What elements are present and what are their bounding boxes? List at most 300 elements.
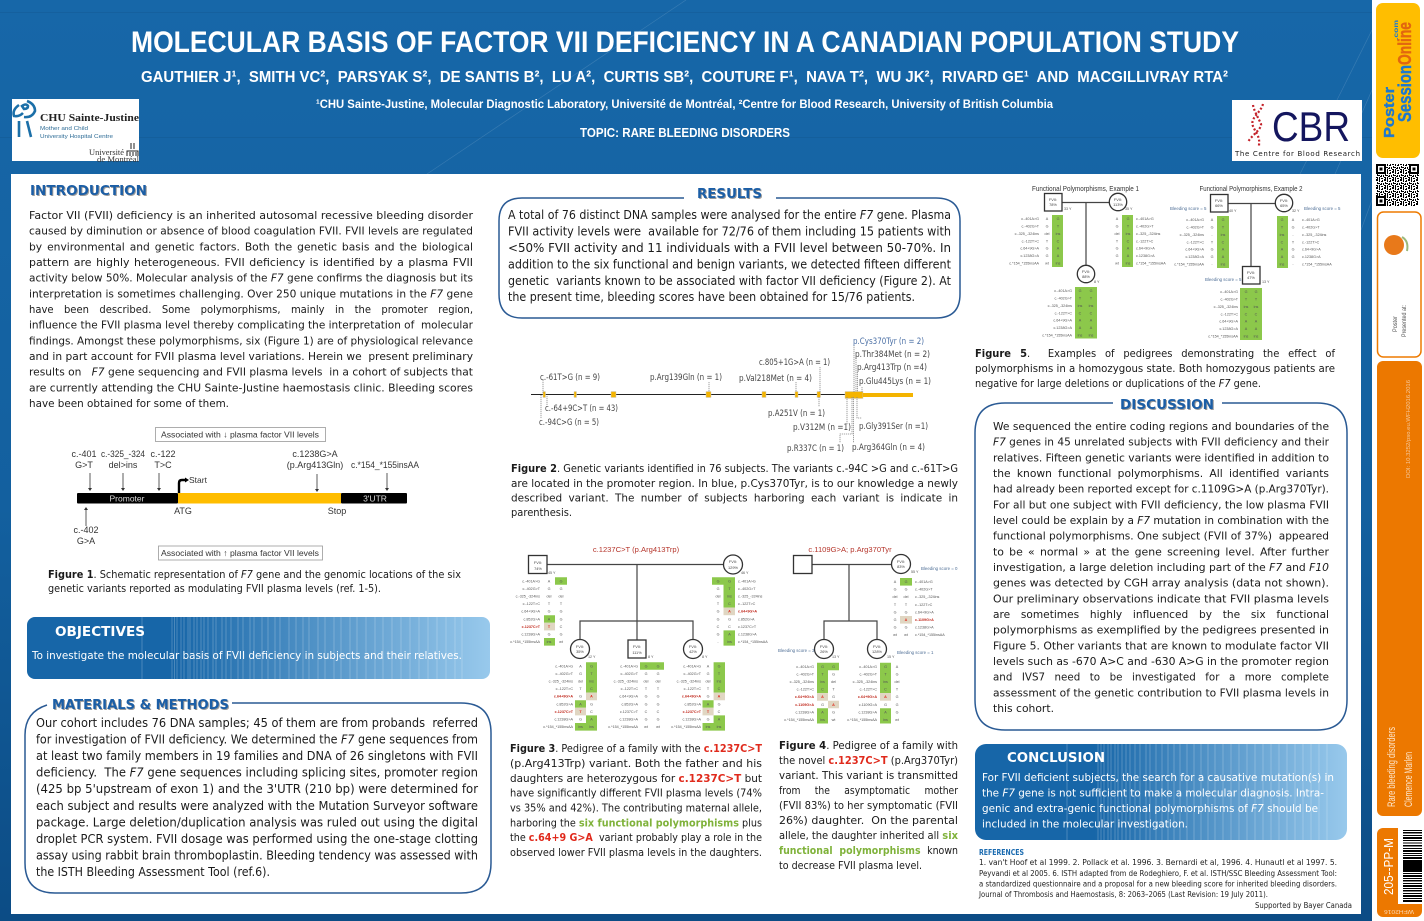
mother haplotype table: G <box>1116 224 1119 228</box>
mother haplotype table: G <box>1292 255 1295 259</box>
mother haplotype table: G <box>1292 248 1295 252</box>
daughter 2 haplotype table: A <box>718 718 721 722</box>
mother haplotype table: c.-402G>T <box>1136 224 1154 228</box>
daughter 2 haplotype table: c.64+9G>A <box>682 695 701 699</box>
variant labels: c.-61T>G (n = 9) <box>540 373 600 383</box>
son haplotype table <box>608 662 664 729</box>
variant labels: p.R337C (n = 1) <box>787 444 844 454</box>
mother symbol: FVII: <box>729 559 737 564</box>
heading: conclusion: CONCLUSION <box>1007 751 1105 766</box>
daughter haplotype table: c.-401A>G <box>796 665 814 669</box>
text: discussion body: level could be explain by a F7 mutation in combination with the <box>993 514 1329 527</box>
daughter 1 haplotype table: C <box>590 710 593 714</box>
mother haplotype table: C <box>728 625 731 629</box>
mother haplotype table: del <box>904 595 909 599</box>
sidebar: poster code with barcode: 205--PP-M <box>1381 838 1396 895</box>
son haplotype table: c.-401A>G <box>859 665 877 669</box>
father haplotype table: wt <box>559 640 563 644</box>
child haplotype table: A <box>1090 326 1093 330</box>
daughter symbol: 26% <box>820 649 828 654</box>
mother haplotype table: - <box>1292 263 1294 267</box>
text: introduction body: are currently attending the CHU Sainte-Justine haemostasis clinic. Bleeding scores <box>29 381 473 394</box>
father haplotype table: c.*154_*155insAA <box>1174 263 1205 267</box>
sidebar: topic panel: Rare bleeding disorders <box>1386 727 1398 807</box>
variant labels: p.Cys370Tyr (n = 2) <box>853 337 924 347</box>
son haplotype table: G <box>645 702 648 706</box>
figure 1: gene schematic <box>71 428 419 560</box>
father haplotype table <box>1174 216 1229 268</box>
son haplotype table: del <box>895 680 900 684</box>
text: methods body: Our cohort includes 76 DNA samples; 45 of them are from probands referred <box>36 716 478 730</box>
daughter 1 haplotype table: G <box>590 702 593 706</box>
father haplotype table: del <box>1045 232 1050 236</box>
daughter 2 haplotype table: del <box>706 680 711 684</box>
daughter haplotype table: c.-402G>T <box>796 672 815 676</box>
mother symbol: 35 Y <box>1125 207 1133 211</box>
father haplotype table: c.64+9G>A <box>1020 247 1040 251</box>
variant labels: p.Arg364Gln (n = 4) <box>852 443 925 453</box>
text: discussion body: are sometimes highly influenced by the six functional <box>993 608 1329 621</box>
mother haplotype table: c.852G>A <box>738 617 755 621</box>
mother haplotype table: ins <box>1126 232 1131 236</box>
figure 5: pedigrees, example 1 <box>1009 186 1166 338</box>
daughter 2 haplotype table: G <box>707 718 710 722</box>
mother haplotype table: T <box>1116 239 1119 243</box>
panel: introduction <box>29 184 474 410</box>
son haplotype table: c.-122T>C <box>621 687 638 691</box>
father symbol <box>794 556 812 574</box>
text: introduction body: results on F7 gene sequencing and FVII plasma levels in a cohort of subjects that <box>29 366 474 379</box>
child haplotype table: ins <box>1244 305 1249 309</box>
child haplotype table: c.-402G>T <box>1220 297 1239 301</box>
daughter haplotype table: c.-325_-324ins <box>790 680 814 684</box>
father haplotype table: C <box>1222 240 1225 244</box>
text: objectives body: To investigate the molecular basis of FVII deficiency in subjects and their relatives. <box>31 649 462 662</box>
daughter haplotype table: G <box>832 672 835 676</box>
daughter haplotype table <box>784 663 839 724</box>
figure 3: pedigree <box>510 545 768 731</box>
mother haplotype table: ins <box>1126 262 1131 266</box>
heading: introduction: INTRODUCTION <box>30 184 147 199</box>
mother haplotype table: c.1237C>T <box>738 625 757 629</box>
mother haplotype table: C <box>1281 240 1284 244</box>
figure 3 caption: vs 35% and 42%). The contributing maternal allele, <box>510 802 762 814</box>
father haplotype table: G <box>560 610 563 614</box>
child symbol: 47% <box>1247 275 1255 280</box>
father haplotype table: G <box>548 610 551 614</box>
father haplotype table: C <box>1057 239 1060 243</box>
mother haplotype table: A <box>905 618 908 622</box>
text: discussion body: Our preliminary observations indicate that FVII plasma levels <box>993 592 1329 605</box>
mother haplotype table: c.-402G>T <box>1302 225 1320 229</box>
father symbol: 33 Y <box>1064 207 1072 211</box>
variant labels: p.Gly391Ser (n =1) <box>859 422 928 432</box>
figure 4 title: c.1109G>A; p.Arg370Tyr <box>808 545 892 554</box>
figure 5 caption: polymorphisms in a homozygous state. Both homozygous patients are <box>975 363 1335 375</box>
father haplotype table: c.*154_*155insAA <box>1009 262 1040 266</box>
panel: materials and methods <box>25 698 491 893</box>
mother symbol: 129% <box>728 565 739 570</box>
daughter 1 haplotype table: A <box>590 695 593 699</box>
daughter 2 haplotype table: c.-325_-324ins <box>677 680 701 684</box>
father haplotype table: c.1237C>T <box>522 625 541 629</box>
mother haplotype table: A <box>1292 218 1295 222</box>
text: conclusion body: genic and extra-genic functional polymorphisms of F7 should be <box>982 802 1318 815</box>
mother symbol: FVII: <box>897 559 905 564</box>
daughter haplotype table: C <box>821 688 824 692</box>
daughter 2 haplotype table: A <box>707 664 710 668</box>
figure 3 title: c.1237C>T (p.Arg413Trp) <box>593 545 680 554</box>
text: discussion body: For all but one subject with FVII deficiency, the low plasma FVII <box>993 498 1329 511</box>
mother haplotype table: A <box>1127 247 1130 251</box>
father haplotype table: G <box>1211 248 1214 252</box>
son haplotype table: wt <box>656 725 660 729</box>
daughter 2 haplotype table: T <box>707 687 710 691</box>
son haplotype table: G <box>645 718 648 722</box>
daughter 1 haplotype table: G <box>579 695 582 699</box>
mother haplotype table: T <box>1281 225 1284 229</box>
daughter haplotype table: T <box>832 688 835 692</box>
son haplotype table: G <box>657 718 660 722</box>
son haplotype table: c.-402G>T <box>859 672 878 676</box>
mother haplotype table: C <box>717 625 720 629</box>
daughter 1 symbol: FVII: <box>576 644 584 649</box>
text: conclusion body <box>982 771 1334 830</box>
sidebar: presented-at card <box>1378 212 1421 357</box>
text: methods body: the ISTH Bleeding Assessment Tool (ref.6). <box>36 865 270 879</box>
child haplotype table <box>1208 288 1262 340</box>
arrows to variant locations <box>84 473 389 526</box>
daughter 1 haplotype table: c.-325_-324ins <box>549 680 573 684</box>
son haplotype table: T <box>896 688 899 692</box>
child haplotype table: G <box>1090 289 1093 293</box>
figure 5: pedigrees, example 2 <box>1170 186 1341 340</box>
father haplotype table: G <box>1057 217 1060 221</box>
barcode <box>1403 830 1422 902</box>
mother haplotype table: c.*154_*155insAA <box>1302 263 1332 267</box>
mother haplotype table: - <box>1292 233 1294 237</box>
logo: CHU Sainte-Justine: Université <box>89 148 124 157</box>
child haplotype table: G <box>1245 290 1248 294</box>
legend box: increased levels <box>158 546 322 560</box>
son haplotype table: G <box>657 695 660 699</box>
pedigree lines <box>812 564 891 640</box>
daughter 1 haplotype table: ins <box>578 725 583 729</box>
daughter haplotype table: A <box>821 710 824 714</box>
child haplotype table: c.*154_*155insAA <box>1042 334 1073 338</box>
father symbol: 40 Y <box>1229 209 1237 213</box>
child haplotype table: A <box>1255 320 1258 324</box>
figure 3 caption: daughters are heterozygous for c.1237C>T but <box>510 773 762 785</box>
gene bar <box>77 493 407 504</box>
daughter 2 haplotype table: c.-122T>C <box>684 687 701 691</box>
child haplotype table: c.64+9G>A <box>1219 320 1239 324</box>
daughter 2 symbol: FVII: <box>689 644 697 649</box>
daughter 1 haplotype table: c.852G>A <box>556 702 574 706</box>
figure 4 caption: variant. This variant is transmitted <box>779 770 958 782</box>
text: discussion body: functional polymorphisms. One subject (FVII of 37%) appeared <box>993 530 1329 543</box>
text: methods body: droplet PCR system. FVII dosage was performed using the one-stage clotting <box>36 832 478 846</box>
daughter 2 haplotype table: C <box>718 687 721 691</box>
daughter haplotype table: del <box>831 680 836 684</box>
daughter 2 haplotype table: A <box>707 702 710 706</box>
mother symbol <box>892 554 958 574</box>
variant labels above gene: c.-401 <box>71 449 97 459</box>
father symbol: 45 Y <box>548 571 556 575</box>
father haplotype table: c.-401A>G <box>1021 217 1039 221</box>
text: introduction body: have been described. Some polymorphisms, mainly in the promoter region, <box>29 303 473 316</box>
father haplotype table <box>510 577 567 646</box>
son haplotype table: c.*154_*155insAA <box>847 718 878 722</box>
mother haplotype table: G <box>894 610 897 614</box>
son haplotype table: del <box>656 680 661 684</box>
variant labels: p.Glu445Lys (n = 1) <box>859 377 931 387</box>
variant labels <box>539 337 931 454</box>
child haplotype table: T <box>1079 296 1082 300</box>
father haplotype table: T <box>548 625 551 629</box>
daughter haplotype table: G <box>832 710 835 714</box>
heading: objectives: OBJECTIVES <box>55 625 145 640</box>
logo: CHU Sainte-Justine: University Hospital Centre <box>40 134 113 140</box>
sidebar: topic panel <box>1377 361 1422 816</box>
text: discussion body: relatives. Fifteen genetic variants were identified in addition to <box>993 451 1329 464</box>
example 1 title: Functional Polymorphisms, Example 1 <box>1032 186 1139 193</box>
heading: materials and methods: MATERIALS & METHODS <box>52 698 229 713</box>
mother haplotype table <box>1115 215 1166 267</box>
daughter 2 haplotype table: c.*154_*155insAA <box>671 725 702 729</box>
father haplotype table: c.-325_-324ins <box>1015 232 1039 236</box>
text: results body <box>508 208 951 304</box>
child haplotype table: c.-325_-324ins <box>1214 305 1238 309</box>
daughter haplotype table: ins <box>820 680 825 684</box>
son symbol <box>868 640 934 659</box>
daughter 2 haplotype table: c.-401A>G <box>683 664 701 668</box>
son symbol: FVII: <box>633 644 641 649</box>
daughter 1 haplotype table: c.64+9G>A <box>554 695 573 699</box>
references: a standardized questionnaire and a proposal for a new bleeding score for inherited bleeding disorders. <box>979 880 1337 888</box>
daughter 2 haplotype table: T <box>707 710 710 714</box>
mother haplotype table: c.*154_*155insAA <box>1136 262 1166 266</box>
authors: GAUTHIER J¹, SMITH VC², PARSYAK S², DE SANTIS B², LU A², CURTIS SB², COUTURE F¹, NAVA T², WU JK², RIVARD GE¹ AND MACGILLIVRAY RTA² <box>141 69 1228 86</box>
child haplotype table <box>1042 287 1097 338</box>
figure 3 caption: the c.64+9 G>A variant probably play a role in the <box>510 832 762 844</box>
references: Peyvandi et al 2005. 6. ISTH adapted from de Rodeghiero, F. et al. ISTH/SSC Bleeding Assessment Tool: <box>979 869 1337 878</box>
mother haplotype table: G <box>894 618 897 622</box>
son haplotype table: G <box>896 703 899 707</box>
mother haplotype table: c.64+9G>A <box>738 610 757 614</box>
panel: discussion <box>975 398 1347 730</box>
variant label below gene: c.-402 <box>73 525 99 535</box>
daughter haplotype table: G <box>832 695 835 699</box>
father symbol: 78% <box>1049 202 1057 207</box>
daughter 1 haplotype table: del <box>578 680 583 684</box>
father symbol <box>528 556 556 575</box>
mother haplotype table: del <box>893 595 898 599</box>
mother haplotype table: c.64+9G>A <box>915 610 934 614</box>
variant labels above gene: del>ins <box>109 460 138 470</box>
text: discussion body: F7 genes in 45 unrelated subjects with FVII deficiency and their <box>993 436 1329 449</box>
references: 1. van't Hoof et al 1999. 2. Pollack et al. 1996. 3. Bernardi et al, 1996. 4. Hunautl et al 1997. 5. <box>979 858 1337 867</box>
figure 3 caption <box>510 743 763 859</box>
text: introduction body: pattern are highly heterogeneous. FVII deficiency is identified by a plasma FVII <box>29 256 473 269</box>
father haplotype table: ins <box>1056 262 1061 266</box>
mother haplotype table: G <box>728 579 731 583</box>
father symbol <box>1044 194 1072 211</box>
son haplotype table: G <box>884 665 887 669</box>
figure 5 caption: Figure 5. Examples of pedigrees demonstrating the effect of <box>975 348 1335 360</box>
mother haplotype table: c.64+9G>A <box>1302 248 1321 252</box>
figure 4 caption: to decrease FVII plasma level. <box>779 860 922 872</box>
start arrow <box>179 475 208 493</box>
daughter 2 haplotype table: T <box>718 672 721 676</box>
daughter 2 haplotype table: C <box>718 710 721 714</box>
sidebar: PosterSessionOnline logo <box>1376 3 1420 158</box>
son haplotype table: c.64+9G>A <box>858 695 877 699</box>
father symbol <box>1170 194 1237 213</box>
daughter 1 haplotype table: G <box>579 672 582 676</box>
father haplotype table: c.1238G>A <box>1185 255 1205 259</box>
son haplotype table: c.1238G>A <box>619 718 639 722</box>
variant labels above gene: c.1238G>A <box>292 449 338 459</box>
daughter 2 haplotype table: A <box>718 695 721 699</box>
figure 4 caption: allele, the daughter inherited all six <box>779 830 958 842</box>
father haplotype table: G <box>1046 247 1049 251</box>
son haplotype table: A <box>884 695 887 699</box>
daughter 1 haplotype table: C <box>590 687 593 691</box>
daughter 2 haplotype table: c.1237C>T <box>683 710 702 714</box>
figure 5 caption: negative for large deletions or duplications of the F7 gene. <box>975 378 1261 390</box>
mother haplotype table: c.-122T>C <box>1136 239 1154 243</box>
daughter haplotype table: G <box>821 703 824 707</box>
mother haplotype table: c.-122T>C <box>915 603 933 607</box>
mother haplotype table: del <box>1115 232 1120 236</box>
variant labels: p.V312M (n =1) <box>793 423 851 433</box>
son haplotype table: A <box>884 710 887 714</box>
ATG and stop labels <box>174 506 346 516</box>
daughter haplotype table: c.64+9G>A <box>795 695 814 699</box>
text: methods body: (425 bp 5'upstream of exon 1) and the 3'UTR (210 bp) were determined for <box>36 782 478 796</box>
father haplotype table: G <box>560 617 563 621</box>
daughter 1 haplotype table: G <box>590 664 593 668</box>
father haplotype table: T <box>1057 224 1060 228</box>
daughter 2 symbol <box>684 640 708 659</box>
mother haplotype table: G <box>1116 247 1119 251</box>
mother haplotype table: c.-325_-324ins <box>915 595 940 599</box>
text: introduction body: by environmental and genetic factors. Both the genetic basis and the biological <box>29 240 473 253</box>
legend box: decreased levels <box>156 428 326 442</box>
figure 4 caption: (FVII 83%) to her symptomatic (FVII <box>779 800 958 812</box>
daughter 2 haplotype table: G <box>718 702 721 706</box>
mother haplotype table: c.-122T>C <box>738 602 756 606</box>
mother haplotype table: ins <box>727 594 732 598</box>
mother haplotype table: c.*154_*155insAA <box>738 640 768 644</box>
father haplotype table: c.64+9G>A <box>521 610 541 614</box>
child symbol: 88% <box>1082 274 1090 279</box>
mother haplotype table: T <box>1292 240 1295 244</box>
child haplotype table: A <box>1079 326 1082 330</box>
text: results body: FVII activity levels were available for 72/76 of them including 15 patients with <box>508 224 951 238</box>
mother haplotype table: A <box>1281 255 1284 259</box>
logo: CHU Sainte-Justine: Mother and Child <box>40 126 88 132</box>
father haplotype table: c.-401A>G <box>522 579 540 583</box>
text: introduction body <box>29 209 474 410</box>
child symbol: FVII: <box>1247 270 1255 275</box>
father haplotype table: T <box>548 602 551 606</box>
daughter 1 haplotype table: c.1238G>A <box>554 718 574 722</box>
child haplotype table: c.1238G>A <box>1053 326 1073 330</box>
father haplotype table: G <box>1222 218 1225 222</box>
father haplotype table: - <box>1211 233 1213 237</box>
son haplotype table: T <box>657 687 660 691</box>
father haplotype table: - <box>1211 263 1213 267</box>
son haplotype table: c.*154_*155insAA <box>608 725 639 729</box>
daughter haplotype table: c.1109G>A <box>795 703 814 707</box>
heading: discussion: DISCUSSION <box>1120 398 1214 413</box>
mother haplotype table: A <box>728 610 731 614</box>
child haplotype table: ins <box>1078 304 1083 308</box>
mother haplotype table: G <box>894 588 897 592</box>
son haplotype table: G <box>884 703 887 707</box>
father haplotype table: C <box>560 625 563 629</box>
father symbol: FVII: <box>1049 197 1057 202</box>
child haplotype table: C <box>1079 311 1082 315</box>
daughter 1 haplotype table: c.1237C>T <box>555 710 574 714</box>
variant labels: p.A251V (n = 1) <box>768 409 825 419</box>
sidebar: PosterSessionOnline logo: Session <box>1395 65 1415 122</box>
mother symbol: FVII: <box>1114 197 1122 202</box>
text: introduction body: and in part account for FVII plasma level variations. Herein we present preliminary <box>29 350 473 363</box>
father haplotype table: T <box>1222 225 1225 229</box>
child haplotype table: ins <box>1089 304 1094 308</box>
child haplotype table: C <box>1255 312 1258 316</box>
father haplotype table: A <box>1222 248 1225 252</box>
son symbol: Bleeding score = 1 <box>897 650 934 655</box>
daughter 2 symbol: 42% <box>689 649 697 654</box>
panel: conclusion <box>975 744 1347 840</box>
child haplotype table: ins <box>1244 335 1249 339</box>
mother haplotype table: c.-401A>G <box>915 580 933 584</box>
mother symbol: 65% <box>1280 203 1288 208</box>
logo: CHU Sainte-Justine: de Montréal <box>97 155 140 164</box>
mother symbol <box>724 555 749 575</box>
legend box: increased levels: Associated with ↑ plasma factor VII levels <box>161 548 319 558</box>
mother haplotype table: T <box>905 603 908 607</box>
son symbol: 111% <box>632 650 642 655</box>
father haplotype table: c.852G>A <box>523 617 541 621</box>
child haplotype table: c.-402G>T <box>1054 296 1073 300</box>
sidebar: topic panel: DOI: 10.3252/pso.eu.WFH2016.2016 <box>1406 380 1412 478</box>
text: results body: addition to the six functional and benign variants, we detected fifteen different <box>508 257 951 271</box>
father haplotype table: c.-402G>T <box>1186 225 1205 229</box>
daughter 1 haplotype table: G <box>579 718 582 722</box>
mother symbol: Bleeding score = 0 <box>921 566 958 571</box>
mother haplotype table: G <box>905 610 908 614</box>
daughter haplotype table: A <box>832 703 835 707</box>
father haplotype table: ins <box>1221 233 1226 237</box>
figure 4 caption: Figure 4. Pedigree of a family with <box>779 740 958 752</box>
variant labels above gene: c.-325_-324 <box>101 449 145 459</box>
icon: congress logo <box>1384 235 1407 255</box>
affiliations: ¹CHU Sainte-Justine, Molecular Diagnostic Laboratory, Université de Montréal, ²Centre for Blood Research, University of British Columbia <box>316 97 1053 111</box>
daughter 2 haplotype table: ins <box>717 725 722 729</box>
references <box>978 848 1337 899</box>
son haplotype table: G <box>896 710 899 714</box>
son haplotype table: C <box>884 688 887 692</box>
mother haplotype table: c.-402G>T <box>915 588 933 592</box>
text: discussion body <box>993 420 1329 715</box>
mother haplotype table: A <box>1281 248 1284 252</box>
figure 3 caption: (p.Arg413Trp) variant. Both the father and his <box>510 758 762 770</box>
